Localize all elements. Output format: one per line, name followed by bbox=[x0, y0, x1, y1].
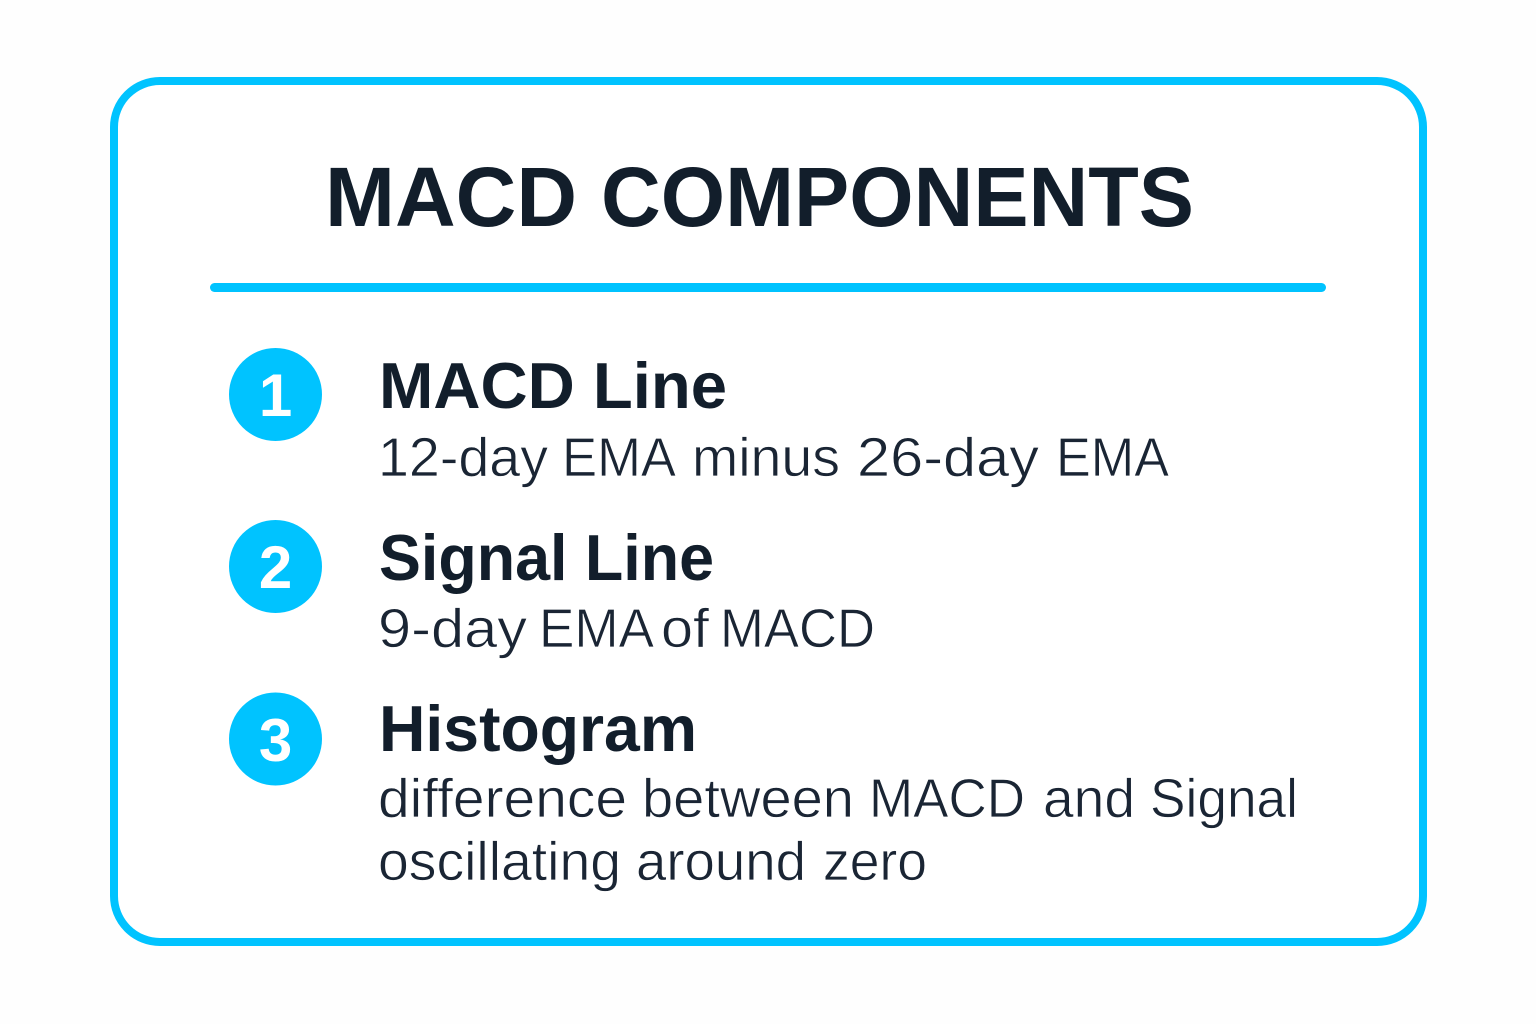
description: Histogram: oscillating bbox=[378, 830, 621, 892]
title: COMPONENTS bbox=[601, 150, 1194, 244]
title underline bbox=[210, 283, 1326, 292]
description: Histogram: and bbox=[1043, 767, 1135, 829]
heading: Histogram: Histogram bbox=[379, 692, 697, 765]
description: Signal Line: of bbox=[661, 597, 710, 659]
description: Histogram: Signal bbox=[1150, 767, 1298, 829]
description: Signal Line bbox=[378, 597, 875, 659]
description: Signal Line: MACD bbox=[720, 597, 875, 659]
item 3: Histogram bbox=[229, 692, 1298, 892]
description: MACD Line: EMA bbox=[1056, 426, 1169, 488]
heading: MACD Line: MACD Line bbox=[379, 349, 727, 422]
icon: number 3 badge bbox=[229, 692, 322, 786]
description: Histogram: MACD bbox=[869, 767, 1025, 829]
heading: Signal Line: Signal Line bbox=[379, 521, 714, 594]
description: Histogram bbox=[378, 767, 1298, 892]
description: Histogram: difference bbox=[378, 767, 627, 829]
description: Signal Line: 9-day bbox=[378, 597, 528, 659]
description: MACD Line bbox=[378, 426, 1169, 488]
item 2: Signal Line bbox=[229, 520, 875, 659]
icon: number 1 badge bbox=[229, 348, 322, 441]
icon: number 2 badge bbox=[229, 520, 322, 613]
description: Histogram: between bbox=[642, 767, 854, 829]
description: Histogram: zero bbox=[823, 830, 927, 892]
title: MACD bbox=[325, 150, 577, 244]
icon: number 3 badge: 3 bbox=[259, 707, 292, 774]
description: Histogram: around bbox=[636, 830, 806, 892]
description: MACD Line: 12-day bbox=[378, 426, 549, 488]
icon: number 2 badge: 2 bbox=[259, 534, 292, 601]
panel: outer rounded frame bbox=[114, 81, 1423, 942]
description: MACD Line: 26-day bbox=[857, 426, 1040, 488]
description: MACD Line: EMA bbox=[562, 426, 676, 488]
item 1: MACD Line bbox=[229, 348, 1169, 488]
title bbox=[325, 150, 1194, 244]
icon: number 1 badge: 1 bbox=[259, 362, 292, 429]
description: Signal Line: EMA bbox=[539, 597, 654, 659]
description: MACD Line: minus bbox=[692, 426, 840, 488]
